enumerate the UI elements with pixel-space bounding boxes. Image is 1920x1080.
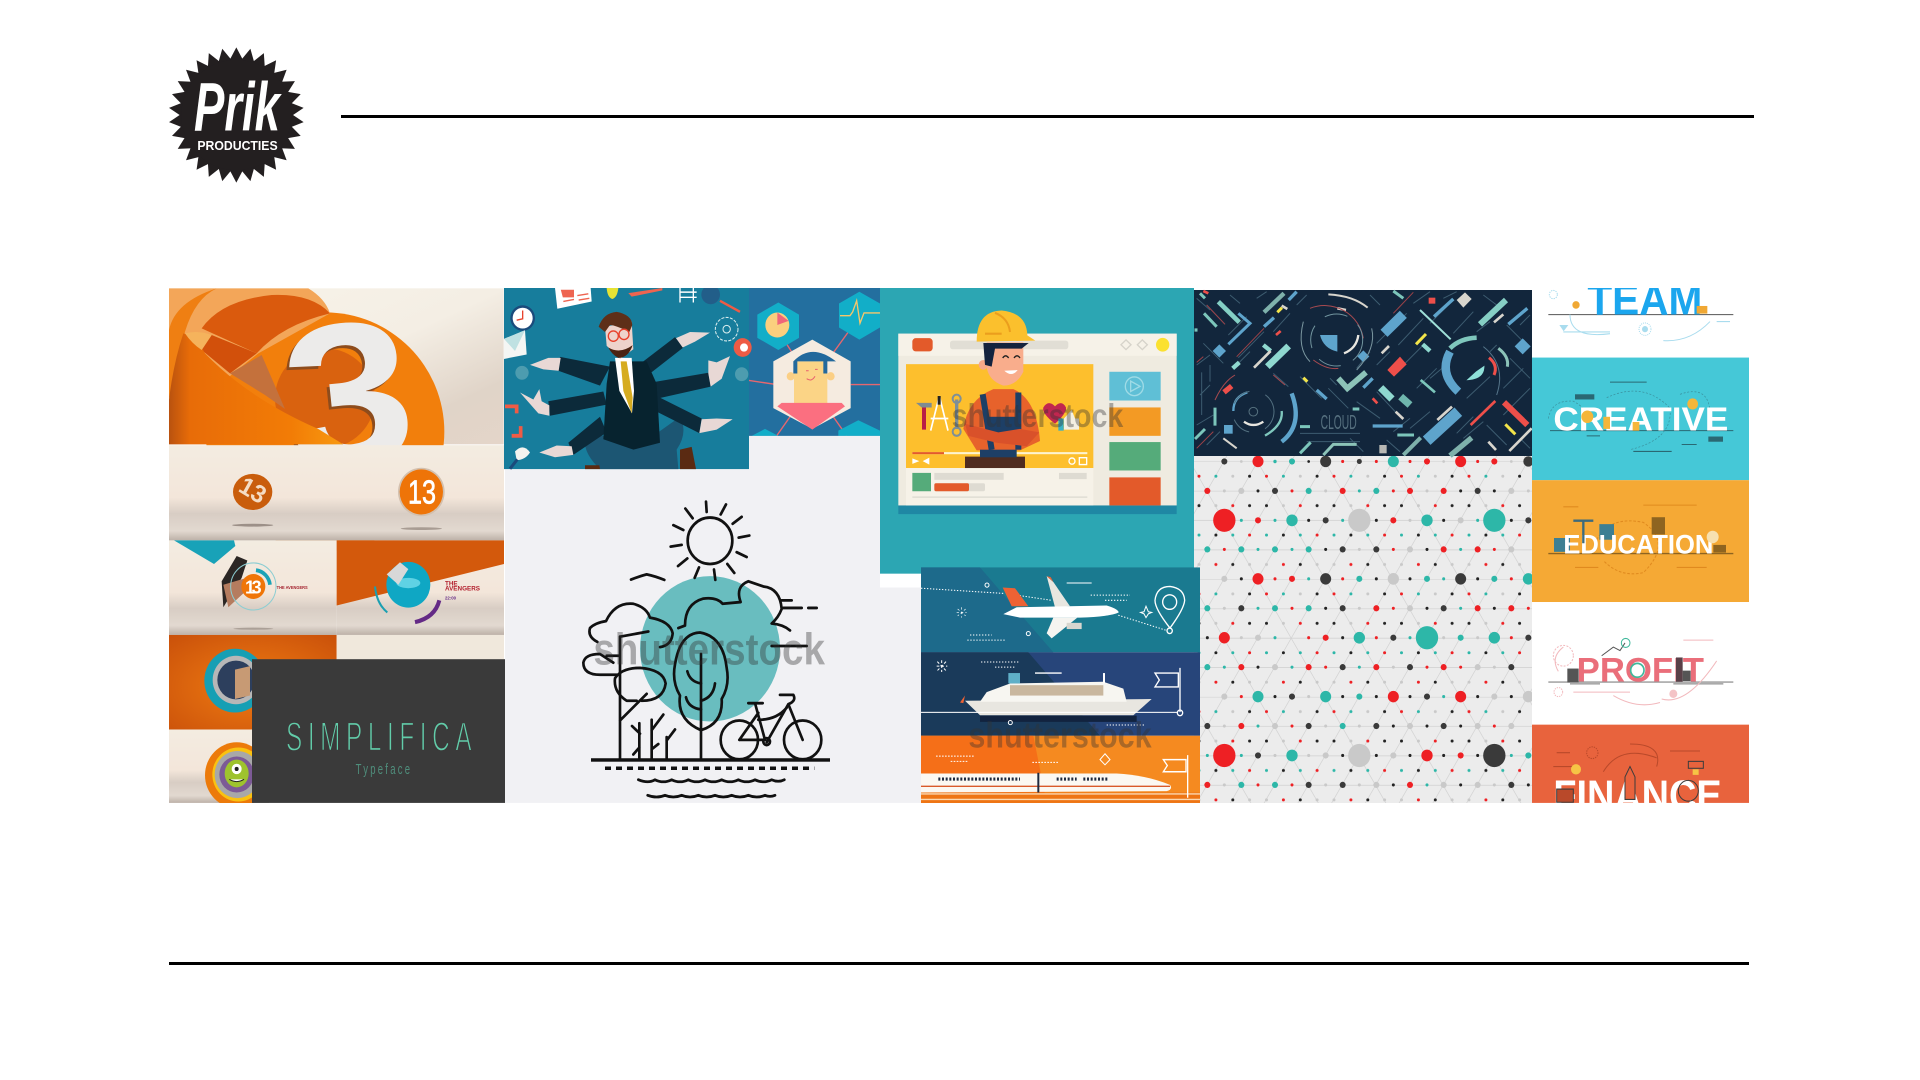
tile: team — [1532, 277, 1749, 358]
icon: sun — [671, 502, 749, 580]
banner: bullet train — [921, 736, 1200, 803]
tile: cream with 13 ring — [169, 540, 337, 635]
tile: profit: PROFIT — [1577, 652, 1704, 690]
tile: cream upper right — [337, 635, 504, 729]
panel: dots network pattern — [1194, 450, 1534, 803]
heart and thumb icons — [1043, 403, 1079, 431]
logo: Prik Producties: PRODUCTIES — [197, 138, 278, 153]
bottom rule — [169, 962, 1749, 965]
tile: education — [1532, 480, 1749, 602]
hero image: orange 3: 3 — [270, 278, 422, 518]
man figure — [548, 312, 711, 469]
rings — [1215, 294, 1508, 448]
clouds — [678, 581, 817, 630]
tile: cream with 13 ring: 13 — [245, 576, 262, 597]
tile: teal sphere: THE — [445, 580, 458, 587]
tile: creative — [1532, 358, 1749, 480]
tile: monster ring — [169, 729, 269, 808]
tile: education: EDUCATION — [1563, 529, 1713, 560]
panel: channel 13 branding collage — [169, 445, 505, 808]
card: Simplifica typeface — [252, 659, 505, 803]
icon: bicycle — [721, 695, 821, 759]
watermark: shutterstock — [952, 397, 1124, 434]
icon: pie hexagon — [757, 303, 799, 350]
browser window — [898, 334, 1177, 514]
tile: teal sphere: AVENGERS — [445, 586, 481, 593]
tool icons — [916, 395, 961, 436]
panel: teal video platform with construction worker — [880, 288, 1194, 574]
avatar in house — [773, 340, 851, 430]
band: two 13 logos — [169, 445, 504, 540]
panel: dark cloud technology pattern: CLOUD — [1321, 411, 1357, 434]
tile: finance: FINANCE — [1553, 771, 1722, 819]
trees — [583, 604, 728, 760]
banner: cruise ship — [921, 652, 1200, 736]
tile: finance — [1532, 725, 1749, 819]
tile: creative: CREATIVE — [1553, 400, 1728, 438]
construction worker — [963, 310, 1040, 468]
panel: dark cloud technology pattern — [1194, 290, 1532, 456]
icon: pulse hexagon — [839, 292, 880, 340]
yellow and white bars — [1277, 308, 1515, 434]
dots rows — [1204, 456, 1534, 788]
logo: Prik Producties — [168, 47, 304, 183]
thin background strokes — [1197, 292, 1530, 452]
watermark: shutterstock — [968, 716, 1152, 756]
card: Simplifica typeface: Typeface — [356, 761, 410, 777]
hero image: orange 3 — [169, 276, 504, 551]
tile: profit — [1532, 602, 1749, 725]
panel: word art column — [1532, 277, 1749, 819]
panel: light grey eco city line illustration — [505, 436, 921, 803]
teal globe — [640, 576, 780, 722]
tile: cream with 13 ring: THE AVENGERS — [277, 585, 308, 590]
band: two 13 logos: 13 — [408, 473, 436, 511]
logo: Prik Producties: Prik — [194, 70, 282, 146]
birds — [631, 574, 807, 646]
tile: orange with portal ring — [169, 635, 337, 729]
office icons — [504, 285, 752, 469]
band: two 13 logos: 13 — [234, 472, 271, 510]
ground and water — [591, 758, 830, 797]
tile: teal sphere: 22:00 — [445, 596, 457, 601]
teal bars — [1195, 291, 1414, 453]
panel: transport banners — [921, 567, 1200, 803]
hands — [520, 332, 733, 457]
hero image: orange 3: 3 — [273, 276, 424, 515]
panel: hexagon avatar illustration — [749, 288, 880, 436]
top rule — [341, 115, 1754, 118]
card: Simplifica typeface: SIMPLIFICA — [286, 715, 472, 760]
watermark: shutterstock — [593, 626, 826, 675]
tile: teal sphere — [337, 540, 504, 635]
banner: airplane — [921, 567, 1200, 652]
blue bars — [1228, 313, 1250, 344]
tile: team: TEAM — [1587, 277, 1702, 325]
red bars — [1387, 357, 1407, 377]
panel: businessman with many arms — [504, 285, 752, 469]
